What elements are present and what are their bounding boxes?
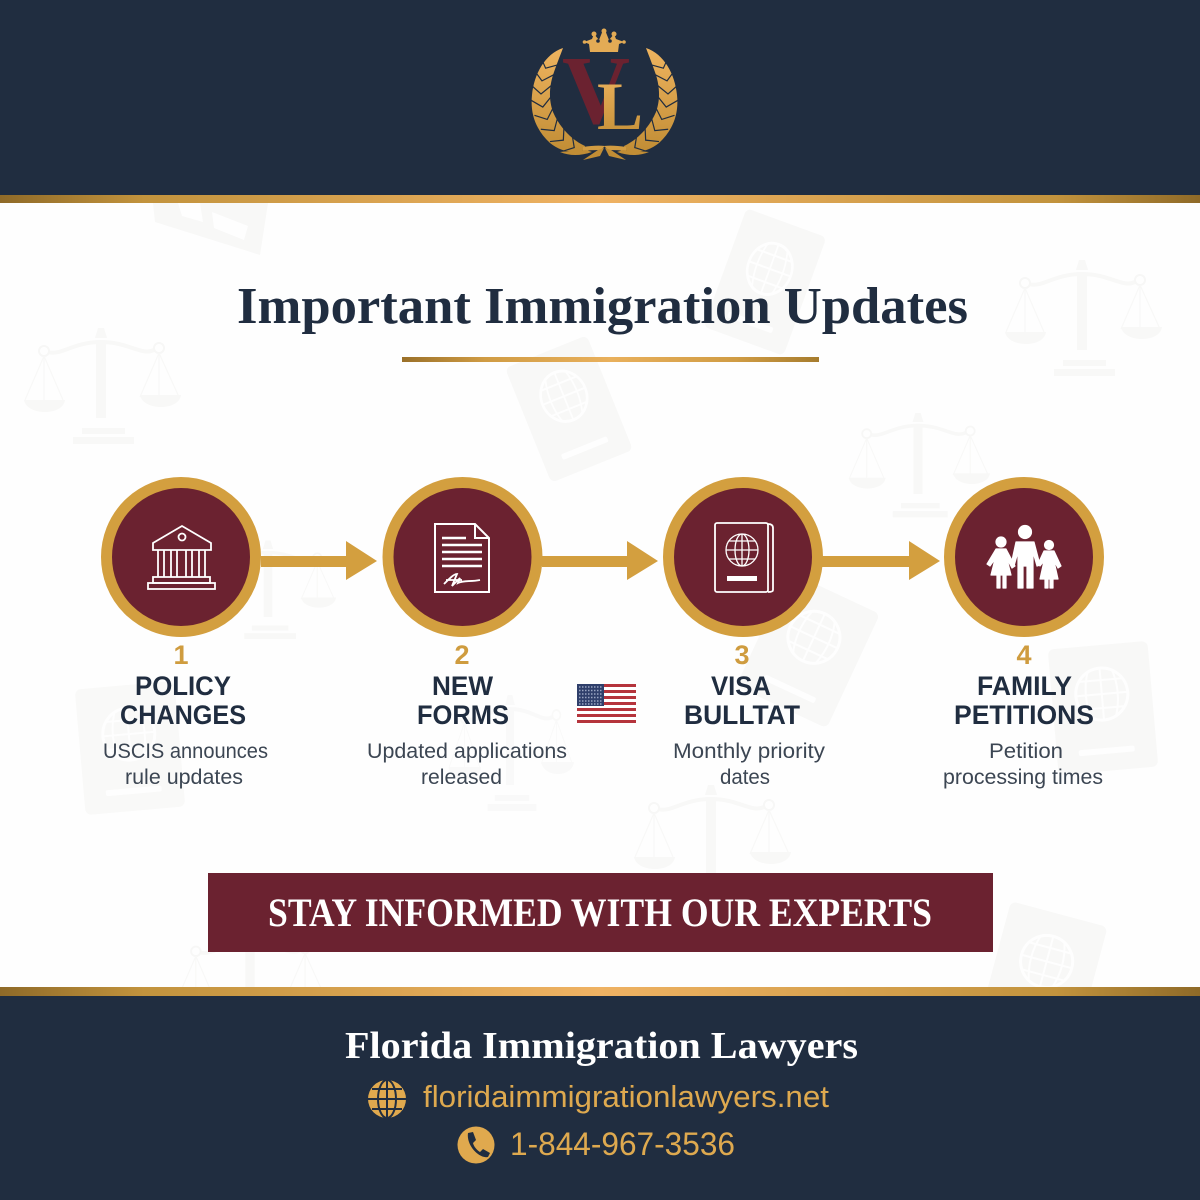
icon: left laurel (531, 48, 605, 160)
icon: government building (106, 482, 256, 632)
step description (367, 740, 567, 789)
header band (0, 0, 1200, 195)
logo: crown, wreath and VL monogram (531, 28, 678, 160)
step description: dates (720, 766, 770, 789)
title underline (402, 357, 819, 362)
step number 4: 4 (1016, 640, 1032, 670)
step heading: POLICY (135, 671, 231, 701)
footer gold stripe (0, 987, 1200, 996)
monogram L: L (597, 68, 643, 144)
step heading: PETITIONS (954, 700, 1094, 730)
step number 2: 2 (454, 640, 470, 670)
monogram V: V (562, 37, 630, 144)
arrow 3 to 4 (822, 541, 940, 580)
icon: right laurel (604, 48, 678, 160)
step heading: FAMILY (977, 671, 1072, 701)
footer band (0, 996, 1200, 1200)
phone number: 1-844-967-3536 (510, 1126, 735, 1162)
step number 3: 3 (734, 640, 750, 670)
step 3: visa bulletin (668, 482, 826, 789)
step heading (954, 671, 1094, 730)
step heading: CHANGES (120, 700, 246, 730)
step heading (417, 671, 509, 730)
decorative watermark pattern (24, 203, 1162, 1049)
title: Important Immigration Updates (237, 278, 968, 335)
step description: rule updates (125, 766, 243, 789)
arrow 1 to 2 (261, 541, 377, 580)
step heading: VISA (711, 671, 771, 701)
step 2: new forms (367, 482, 567, 789)
call to action banner: STAY INFORMED WITH OUR EXPERTS (268, 890, 932, 935)
icon: globe (368, 1080, 406, 1118)
arrow 2 to 3 (542, 541, 658, 580)
step description (103, 740, 268, 789)
step 4: family petitions (943, 482, 1103, 789)
step description: processing times (943, 766, 1103, 789)
step heading: FORMS (417, 700, 509, 730)
step number 1: 1 (173, 640, 189, 670)
icon: family (950, 482, 1098, 632)
step heading (684, 671, 800, 730)
step description: USCIS announces (103, 740, 268, 763)
step heading: NEW (432, 671, 493, 701)
header gold stripe (0, 195, 1200, 203)
step description (673, 740, 826, 789)
icon: american flag (577, 684, 636, 724)
icon: signed document (388, 482, 537, 632)
step description: released (421, 766, 502, 789)
call to action banner (208, 873, 993, 952)
step description (943, 740, 1103, 789)
step description: Petition (989, 740, 1063, 763)
step 1: policy changes (103, 482, 268, 789)
firm name: Florida Immigration Lawyers (345, 1025, 858, 1067)
step description: Updated applications (367, 740, 567, 763)
step heading: BULLTAT (684, 700, 800, 730)
step heading (120, 671, 246, 730)
icon: phone (458, 1126, 494, 1164)
icon: passport (668, 482, 818, 632)
icon: crown (583, 28, 626, 52)
step description: Monthly priority (673, 740, 826, 763)
website: floridaimmigrationlawyers.net (423, 1079, 829, 1114)
